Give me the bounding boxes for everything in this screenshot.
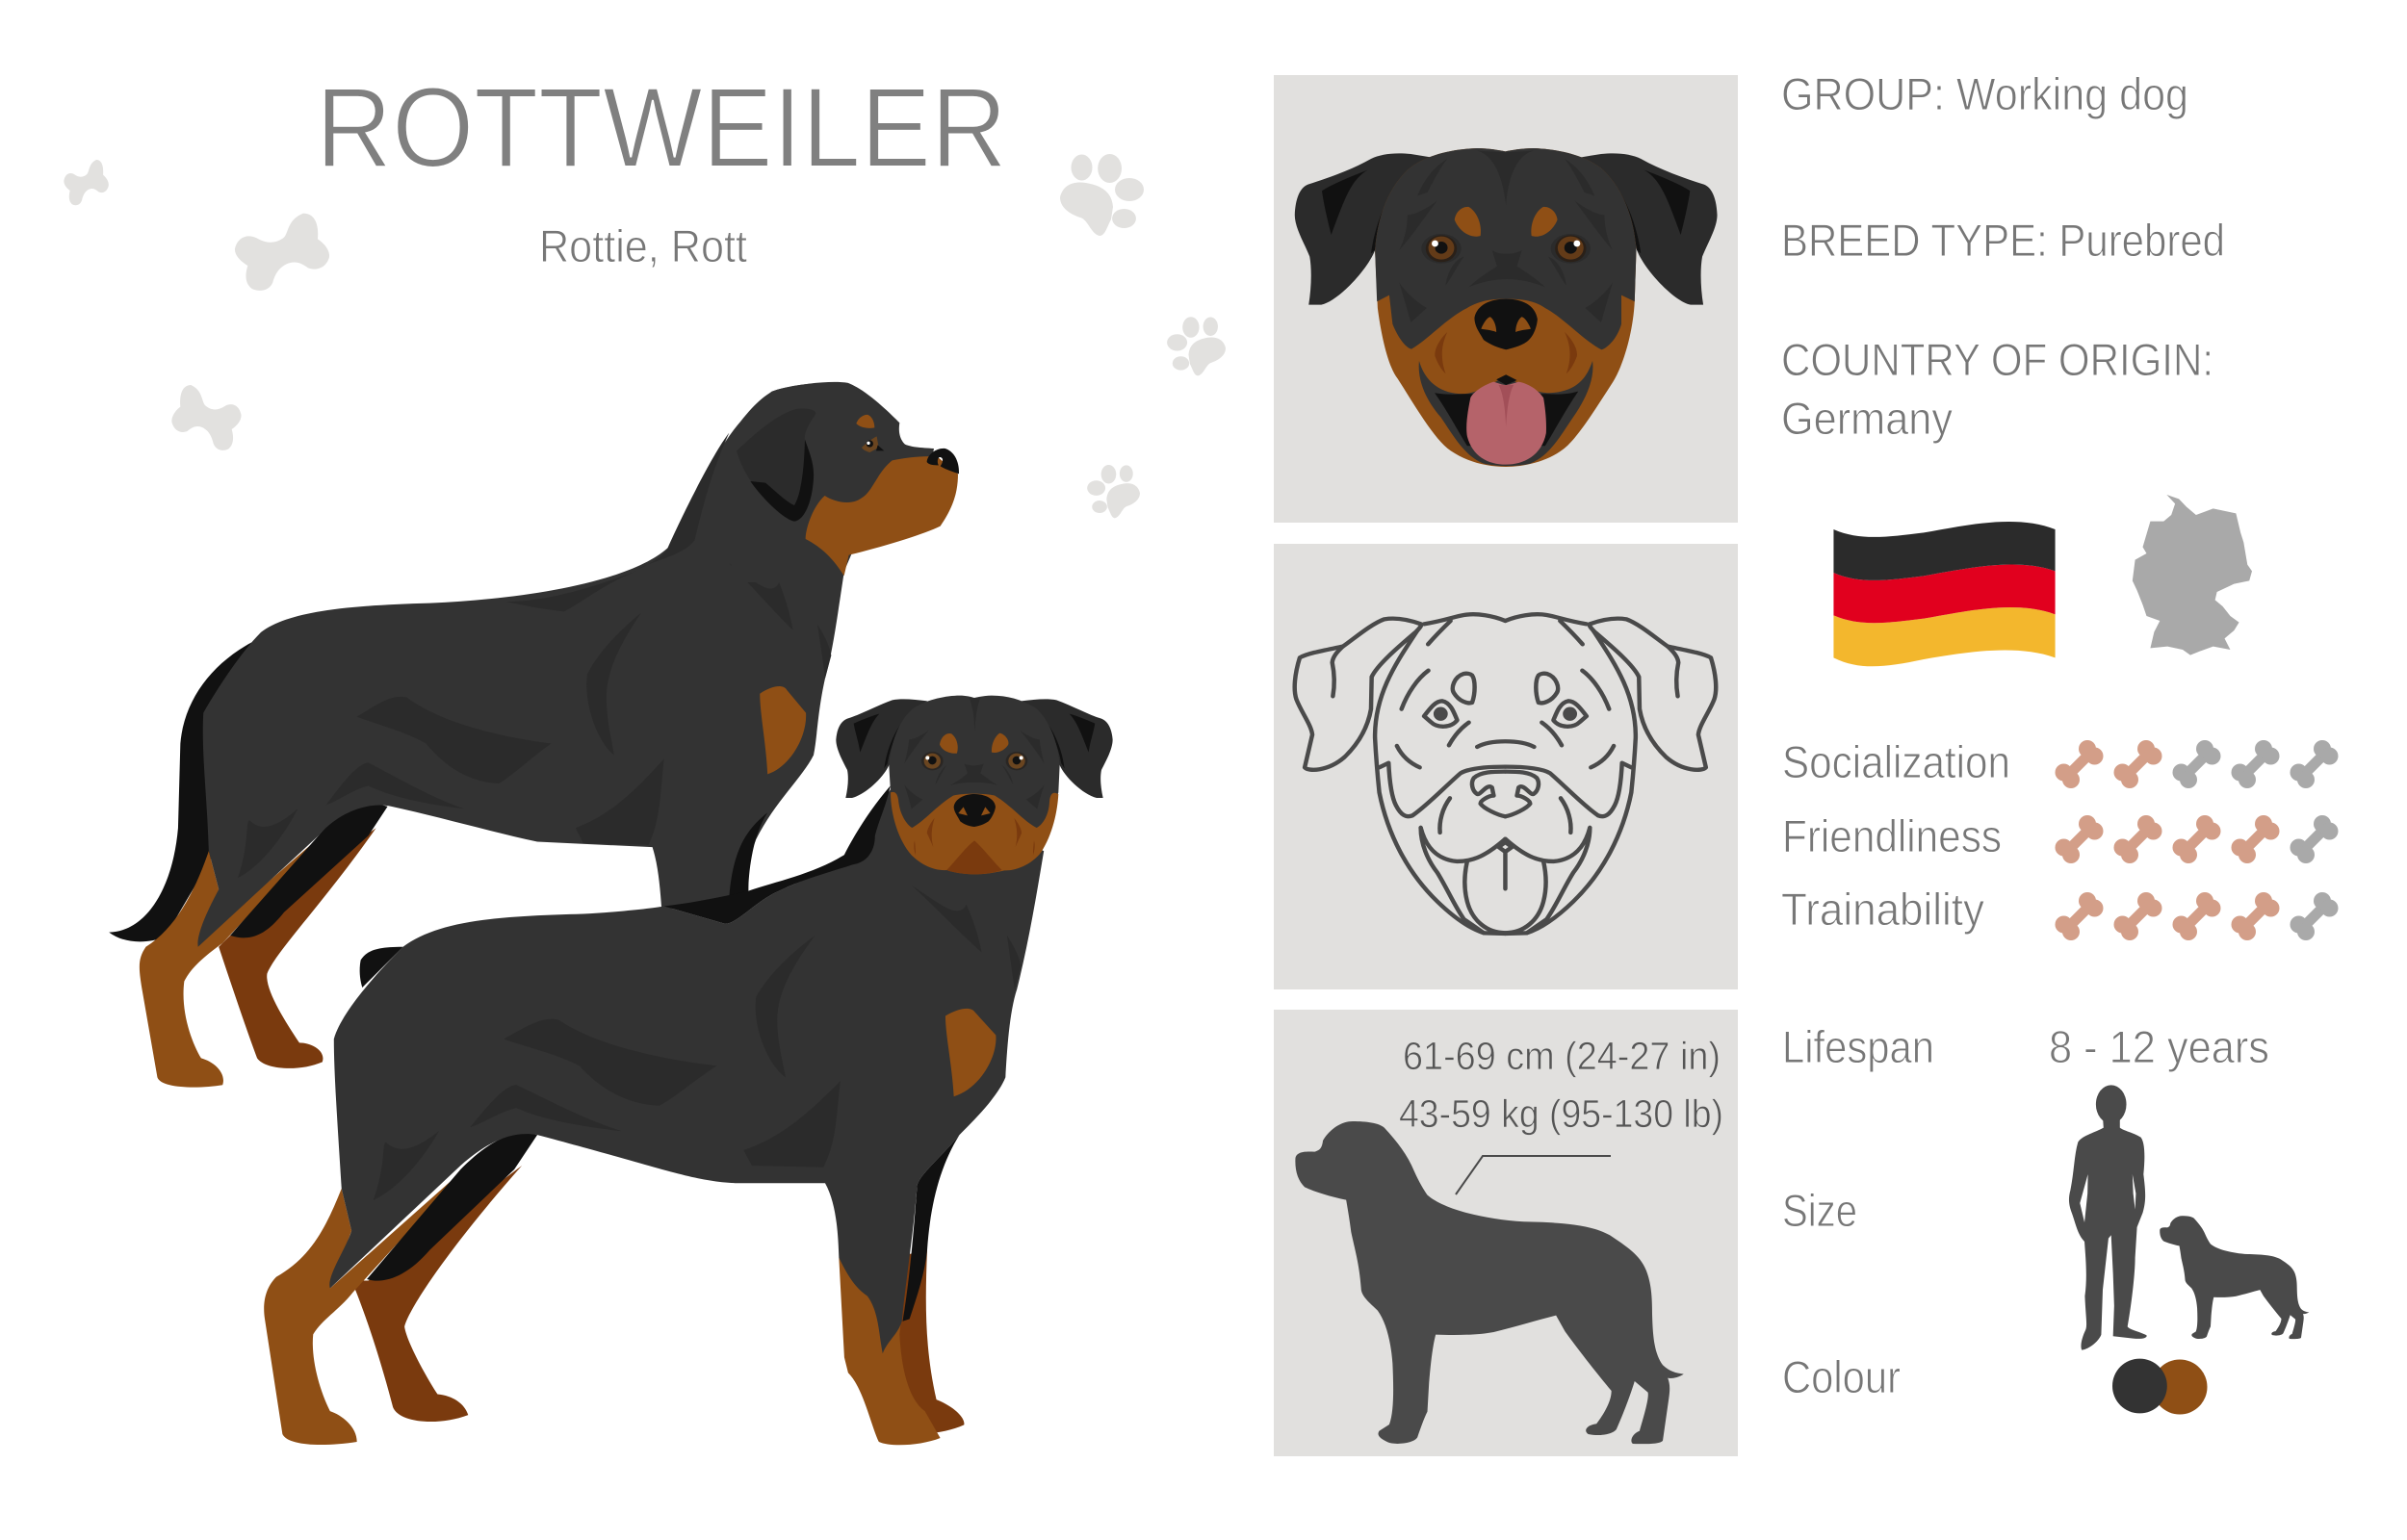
tail stub	[360, 947, 403, 988]
label: socialization: Socialization	[1782, 736, 2010, 787]
label: colour: Colour	[1782, 1351, 1901, 1402]
tan swatch	[2153, 1359, 2207, 1415]
paw medium	[1167, 317, 1226, 375]
right half	[1505, 614, 1716, 934]
left half	[1295, 614, 1505, 934]
nose	[954, 794, 996, 827]
text: Germany: Germany	[1781, 393, 1953, 444]
neck edge shade	[637, 433, 729, 570]
rating: socialization 2 of 5	[2055, 740, 2338, 788]
brow spots	[940, 733, 1008, 754]
chest shade	[817, 625, 831, 679]
ear fold	[750, 440, 814, 522]
tongue centre line	[1499, 385, 1514, 426]
bone small	[64, 160, 109, 205]
label: friendliness: Friendliness	[1782, 810, 2002, 861]
eye highlight	[867, 442, 870, 445]
far front leg	[894, 1250, 964, 1434]
black stripe	[1833, 522, 2056, 580]
nose	[1474, 299, 1538, 349]
black swatch	[2112, 1359, 2167, 1413]
rating labels	[1781, 736, 2010, 935]
text: breed type: BREED TYPE: Purebred	[1781, 215, 2225, 266]
body	[197, 382, 933, 947]
nose	[927, 449, 959, 474]
front dog head	[836, 696, 1113, 874]
eyebrow spot	[856, 415, 874, 428]
tongue	[1466, 382, 1546, 465]
panel: line-art head	[1274, 544, 1738, 989]
belly shadow	[230, 804, 388, 937]
near front leg tan	[839, 1239, 941, 1445]
back shade	[506, 571, 637, 611]
rear dog head	[732, 382, 959, 582]
flag of Germany	[1833, 522, 2056, 666]
human silhouette for scale	[2069, 1085, 2147, 1350]
body shading	[238, 563, 806, 878]
mouth interior	[1435, 392, 1578, 446]
rear dog standing in profile	[109, 382, 933, 1088]
label: size: Size	[1782, 1185, 1857, 1236]
nostrils	[1481, 317, 1531, 332]
leader line	[1456, 1156, 1611, 1194]
outline head illustration	[1295, 614, 1716, 934]
panel background	[1274, 1010, 1738, 1456]
label: trainability: Trainability	[1781, 884, 1984, 935]
body	[329, 789, 1044, 1353]
panel: size	[1274, 1010, 1738, 1456]
text: country of origin: COUNTRY OF ORIGIN:	[1781, 334, 2213, 385]
colour head illustration	[1295, 148, 1718, 467]
ears	[836, 699, 1113, 798]
ear	[737, 409, 815, 522]
belly shadow	[367, 1134, 537, 1281]
rating: trainability 4 of 5	[2055, 892, 2338, 940]
forehead shade	[1477, 151, 1534, 205]
paw small	[1087, 465, 1140, 518]
pupil	[867, 440, 873, 448]
bone large	[235, 214, 329, 291]
eye corner	[876, 445, 884, 450]
subtitle: alternative names: Rottie, Rott	[539, 220, 747, 271]
value: lifespan: 8 - 12 years	[2049, 1021, 2269, 1072]
front dog standing with head turned	[264, 785, 1044, 1445]
body shading	[374, 886, 996, 1200]
skull	[889, 696, 1060, 834]
title: ROTTWEILER	[316, 64, 1007, 192]
eye patch	[862, 436, 879, 452]
left face details	[904, 730, 946, 855]
head dark cap	[1375, 148, 1637, 349]
lip notch	[1496, 374, 1517, 385]
nose bridge shade	[950, 763, 998, 785]
nose bridge shade	[1469, 250, 1545, 287]
nostrils	[958, 807, 991, 815]
muzzle line	[1477, 741, 1534, 747]
text: group: GROUP: Working dog	[1781, 68, 2188, 119]
panel background	[1274, 75, 1738, 523]
red stripe	[1833, 564, 2056, 623]
chest shade	[1007, 936, 1021, 989]
front leg black edge	[903, 1135, 959, 1322]
panel background	[1274, 544, 1738, 989]
right face details	[1002, 730, 1045, 855]
head tan base	[1375, 148, 1637, 467]
rating: friendliness 4 of 5	[2055, 815, 2338, 863]
bone medium	[171, 385, 242, 450]
dog silhouette	[1295, 1121, 1684, 1444]
map of Germany	[2133, 495, 2252, 655]
mouth centre	[1499, 842, 1512, 888]
eyes, brows and creases	[1399, 159, 1613, 373]
colour swatches	[2112, 1359, 2207, 1415]
muzzle tan	[891, 792, 1058, 874]
height text: 61-69 cm (24-27 in)	[1403, 1034, 1721, 1078]
dog silhouette for scale	[2160, 1216, 2309, 1339]
leg black	[729, 812, 767, 897]
mouth	[1419, 361, 1592, 466]
skull	[732, 382, 934, 582]
decorative bones and paws	[64, 154, 1226, 518]
muzzle tan	[806, 456, 958, 576]
near hind leg	[264, 1166, 468, 1445]
tail	[109, 638, 261, 941]
neck black shadow	[664, 785, 891, 924]
far hind leg	[351, 1166, 522, 1422]
near hind leg	[140, 828, 330, 1088]
far hind leg	[219, 828, 376, 1068]
forehead shade	[970, 698, 980, 732]
yellow stripe	[1833, 607, 2056, 666]
label: lifespan: Lifespan	[1782, 1021, 1934, 1072]
ears	[1295, 153, 1718, 305]
panel: head portrait	[1274, 75, 1738, 523]
chin	[946, 840, 1002, 874]
weight text: 43-59 kg (95-130 lb)	[1399, 1091, 1723, 1136]
paw large	[1060, 154, 1144, 236]
